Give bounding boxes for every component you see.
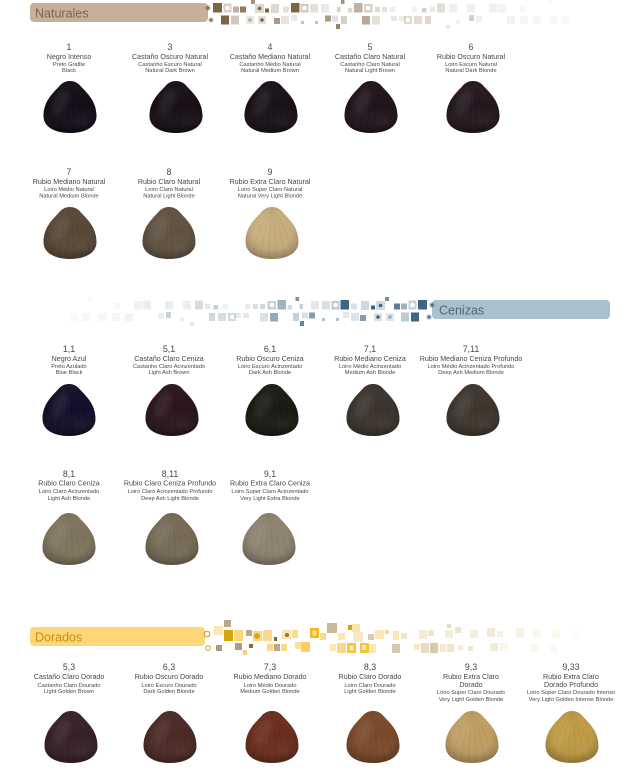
shade 7,1: Rubio Mediano Ceniza — [334, 355, 406, 363]
shade 7,3 — [234, 662, 307, 763]
shade 9,1: Rubio Extra Claro Ceniza — [230, 480, 310, 488]
shade 6 — [437, 42, 506, 133]
shade 1: Preto Grafite — [53, 62, 85, 68]
shade 5,1: Light Ash Brown — [148, 370, 190, 376]
shade 1 — [43, 42, 97, 133]
shade 5,1: 5,1 — [163, 344, 175, 354]
shade 5: Natural Light Brown — [345, 68, 395, 74]
shade 8,1: 8,1 — [63, 469, 75, 479]
shade 5,3 — [34, 662, 104, 763]
shade 9,3 — [437, 662, 505, 763]
shade 8,3: Light Golden Blonde — [344, 689, 396, 695]
shade 9,3: 9,3 — [465, 662, 477, 672]
shade 8,1 — [38, 469, 100, 565]
shade 7,11: Deep Ash Medium Blonde — [438, 370, 504, 376]
shade 5: Castanho Claro Natural — [340, 62, 400, 68]
shade 9,1 — [230, 469, 310, 565]
shade 6,1 — [236, 344, 304, 436]
shade 5,3: 5,3 — [63, 662, 75, 672]
shade 9,3: Rubio Extra Claro — [443, 673, 499, 681]
shade 8,3 — [339, 662, 401, 763]
shade 7,11: Rubio Mediano Ceniza Profundo — [420, 355, 522, 363]
shade 1,1: Preto Azulado — [51, 364, 87, 370]
banner label: Cenizas — [439, 304, 484, 318]
shade 8,11: Deep Ash Light Blonde — [141, 496, 199, 502]
banner: Cenizas — [70, 297, 610, 326]
shade 7,3: Loiro Médio Dourado — [243, 683, 297, 689]
shade 3: Castanho Escuro Natural — [138, 62, 202, 68]
shade 1,1: 1,1 — [63, 344, 75, 354]
shade 1: 1 — [67, 42, 72, 52]
banner label: Dorados — [35, 630, 82, 644]
shade 8,11: 8,11 — [162, 469, 178, 479]
shade 5,3: Light Golden Brown — [44, 689, 94, 695]
shade 9,33: Rubio Extra Claro — [543, 673, 599, 681]
shade 8: Natural Light Blonde — [143, 194, 195, 200]
shade 9 — [230, 167, 311, 259]
shade 7,11: 7,11 — [463, 344, 479, 354]
banner label: Naturales — [35, 6, 88, 20]
shade 6,3: Dark Golden Blonde — [143, 689, 195, 695]
shade 5,1 — [133, 344, 205, 436]
shade 8,3: 8,3 — [364, 662, 376, 672]
shade 7,11 — [420, 344, 522, 436]
shade 9: Loiro Super Claro Natural — [238, 187, 302, 193]
shade 5,3: Castaño Claro Dorado — [34, 673, 104, 681]
shade 8,3: Loiro Claro Dourado — [344, 683, 396, 689]
shade 7 — [33, 167, 106, 259]
shade 1: Negro Intenso — [47, 53, 91, 61]
shade 8,11 — [124, 469, 216, 565]
shade 6,3 — [135, 662, 203, 763]
shade 8,1: Rubio Claro Ceniza — [38, 480, 100, 488]
shade 7,11: Loiro Médio Acinzentado Profundo — [428, 364, 514, 370]
banner: Naturales — [30, 0, 570, 29]
shade 6: Natural Dark Blonde — [445, 68, 497, 74]
shade 3: Castaño Oscuro Natural — [132, 53, 208, 61]
banner: Dorados — [30, 620, 580, 655]
shade 6,3: Loiro Escuro Dourado — [141, 683, 197, 689]
shade 6,3: Rubio Oscuro Dorado — [135, 673, 203, 681]
shade 7,3: Medium Golden Blonde — [240, 689, 300, 695]
shade 1: Black — [62, 68, 76, 74]
shade 6,1: Rubio Oscuro Ceniza — [236, 355, 304, 363]
decorative squares — [205, 0, 570, 29]
shade 7,1: Loiro Médio Acinzentado — [339, 364, 401, 370]
shade 7,1: Medium Ash Blonde — [345, 370, 395, 376]
shade 3: Natural Dark Brown — [145, 68, 195, 74]
banner bar — [30, 627, 205, 646]
shade 5,1: Castanho Claro Acinzentado — [133, 364, 205, 370]
shade 3 — [132, 42, 208, 133]
shade 7: Loiro Médio Natural — [44, 187, 94, 193]
shade 6,3: 6,3 — [163, 662, 175, 672]
shade 9,33: 9,33 — [562, 662, 580, 672]
shade 7,3: Rubio Mediano Dorado — [234, 673, 307, 681]
shade 3: 3 — [168, 42, 173, 52]
shade 9: Natural Very Light Blonde — [238, 194, 302, 200]
shade 6: Rubio Oscuro Natural — [437, 53, 506, 61]
shade 9,33: Dorado Profundo — [544, 681, 598, 689]
shade 4 — [230, 42, 311, 133]
shade 9,1: 9,1 — [264, 469, 276, 479]
shade 8,1: Loiro Claro Acinzentado — [39, 489, 99, 495]
shade 9,1: Very Light Extra Blonde — [240, 496, 300, 502]
shade 8,11: Loiro Claro Acinzentado Profundo — [127, 489, 213, 495]
shade 7,1: 7,1 — [364, 344, 376, 354]
shade 4: 4 — [268, 42, 273, 52]
decorative squares — [70, 297, 435, 326]
shade 8,3: Rubio Claro Dorado — [339, 673, 401, 681]
shade 7: 7 — [67, 167, 72, 177]
shade 5,1: Castaño Claro Ceniza — [134, 355, 204, 363]
shade 9,3: Loiro Super Claro Dourado — [437, 690, 505, 696]
shade 9,33: Loiro Super Claro Dourado Intenso — [527, 690, 615, 696]
shade 5,3: Castanho Claro Dourado — [38, 683, 100, 689]
shade 5: Castaño Claro Natural — [335, 53, 406, 61]
shade 6: Loiro Escuro Natural — [445, 62, 497, 68]
banner bar — [432, 300, 610, 319]
decorative squares — [204, 620, 580, 655]
shade 9: 9 — [268, 167, 273, 177]
shade 7: Rubio Mediano Natural — [33, 178, 106, 186]
shade 9,3: Very Light Golden Blonde — [439, 697, 503, 703]
shade 7: Natural Medium Blonde — [39, 194, 99, 200]
shade 9,33: Very Light Golden Intense Blonde — [529, 697, 613, 703]
shade 8,11: Rubio Claro Ceniza Profundo — [124, 480, 216, 488]
shade 4: Natural Medium Brown — [241, 68, 299, 74]
banner bar — [30, 3, 208, 22]
shade 6: 6 — [469, 42, 474, 52]
shade 9,1: Loiro Super Claro Acinzentado — [231, 489, 309, 495]
shade 6,1: 6,1 — [264, 344, 276, 354]
shade 9: Rubio Extra Claro Natural — [230, 178, 311, 186]
shade 8: Rubio Claro Natural — [138, 178, 201, 186]
shade 6,1: Loiro Escuro Acinzentado — [238, 364, 302, 370]
shade 4: Castaño Mediano Natural — [230, 53, 311, 61]
shade 9,3: Dorado — [459, 681, 483, 689]
shade 6,1: Dark Ash Blonde — [249, 370, 291, 376]
shade 4: Castanho Médio Natural — [239, 62, 301, 68]
shade 5 — [335, 42, 406, 133]
shade 1,1 — [42, 344, 96, 436]
shade 9,33 — [527, 662, 615, 763]
shade 5: 5 — [368, 42, 373, 52]
shade 8,1: Light Ash Blonde — [48, 496, 90, 502]
shade 8: 8 — [167, 167, 172, 177]
shade 1,1: Blue Black — [56, 370, 83, 376]
shade 8: Loiro Claro Natural — [145, 187, 193, 193]
shade 7,3: 7,3 — [264, 662, 276, 672]
shade 7,1 — [334, 344, 406, 436]
shade 8 — [138, 167, 201, 259]
shade 1,1: Negro Azul — [52, 355, 87, 363]
